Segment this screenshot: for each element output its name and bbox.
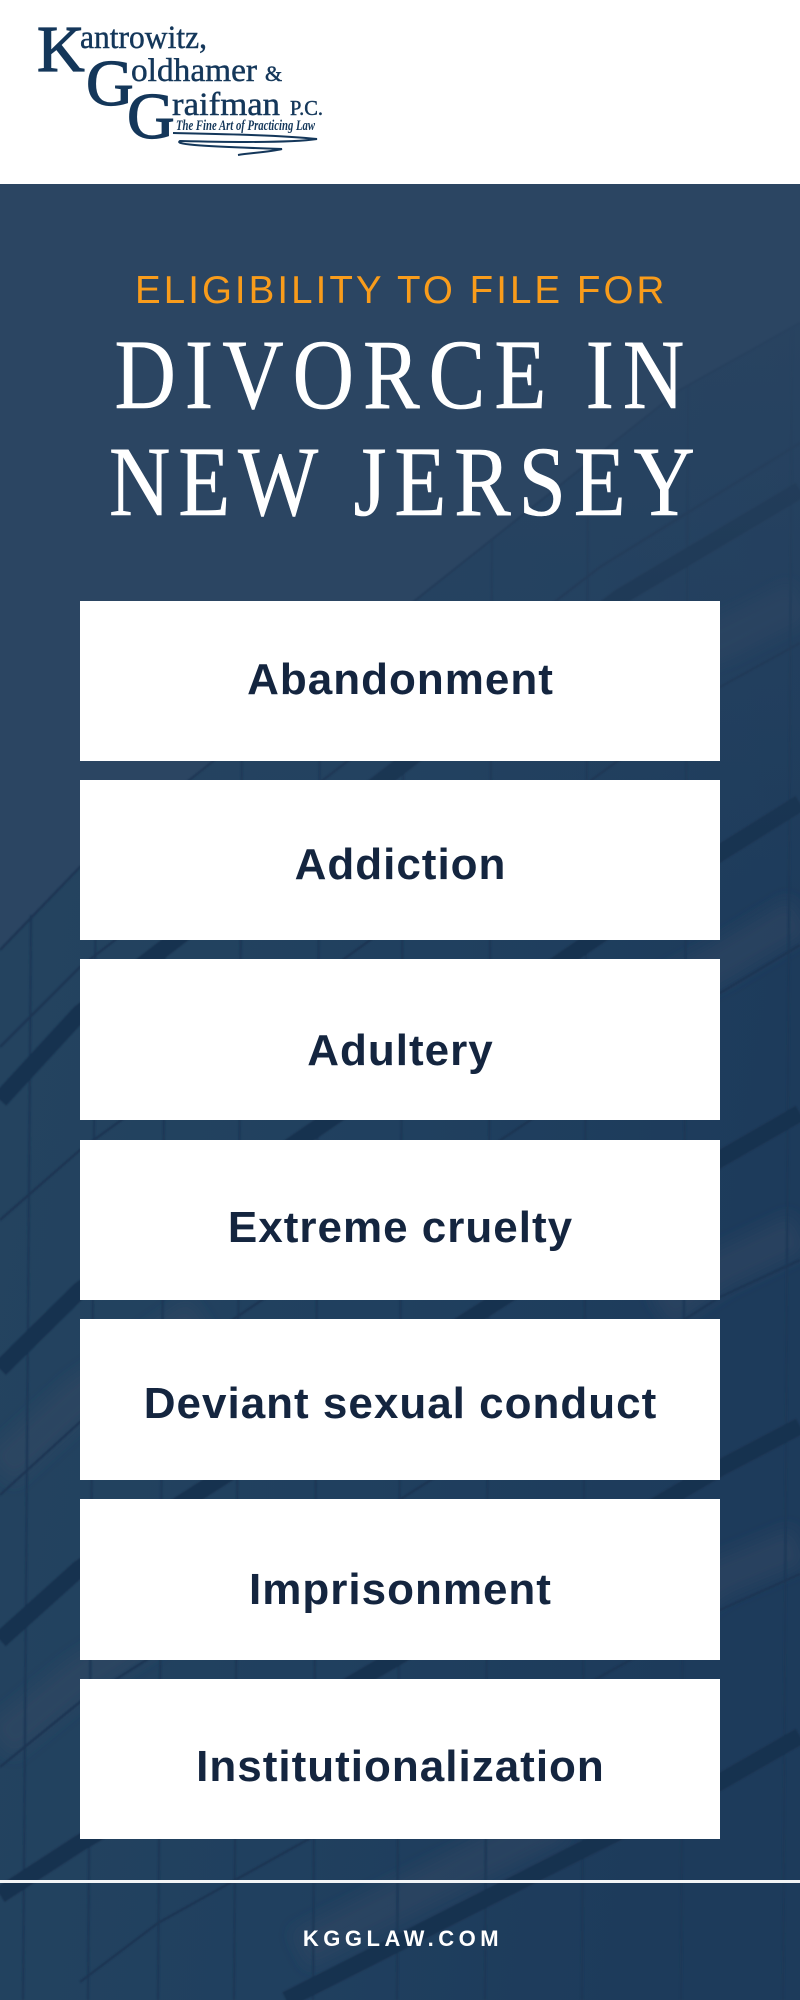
card: Abandonment: Abandonment [247,655,554,704]
heading line 2: NEW JERSEY [109,427,703,538]
card: Adultery: Adultery [307,1026,494,1075]
card: Extreme cruelty [80,1140,720,1300]
heading line 1: DIVORCE IN [114,320,693,431]
card: Institutionalization [80,1679,720,1839]
card: Imprisonment: Imprisonment [249,1565,552,1614]
logo: Kantrowitz, Goldhamer & Graifman P.C.: oldhamer [131,53,257,89]
thick diagonal bands [0,490,800,2000]
logo: Kantrowitz, Goldhamer & Graifman P.C.: & [265,61,282,86]
logo: Kantrowitz, Goldhamer & Graifman P.C.: K [37,13,85,86]
title block [109,269,703,538]
card: Addiction [80,780,720,940]
logo: Kantrowitz, Goldhamer & Graifman P.C. [37,13,323,156]
card: Deviant sexual conduct: Deviant sexual conduct [144,1379,657,1428]
logo: Kantrowitz, Goldhamer & Graifman P.C.: G [86,47,134,120]
logo: Kantrowitz, Goldhamer & Graifman P.C.: antrowitz, [80,20,207,56]
card: Deviant sexual conduct [80,1319,720,1480]
logo: Kantrowitz, Goldhamer & Graifman P.C.: P.C. [290,96,323,120]
card: Imprisonment [80,1499,720,1660]
logo: Kantrowitz, Goldhamer & Graifman P.C.: raifman [172,87,280,123]
subtitle: ELIGIBILITY TO FILE FOR [135,269,667,312]
logo: Kantrowitz, Goldhamer & Graifman P.C.: G [127,80,175,153]
header: white logo bar [0,0,800,184]
card: Institutionalization: Institutionalization [196,1742,605,1791]
card: Abandonment [80,601,720,761]
card: Extreme cruelty: Extreme cruelty [228,1203,573,1252]
footer website: KGGLAW.COM [303,1926,503,1951]
footer rule [0,1880,800,1883]
logo: Kantrowitz, Goldhamer & Graifman P.C.: The Fine Art of Practicing Law [176,118,315,134]
card: Addiction: Addiction [295,840,506,889]
card: Adultery [80,959,720,1120]
